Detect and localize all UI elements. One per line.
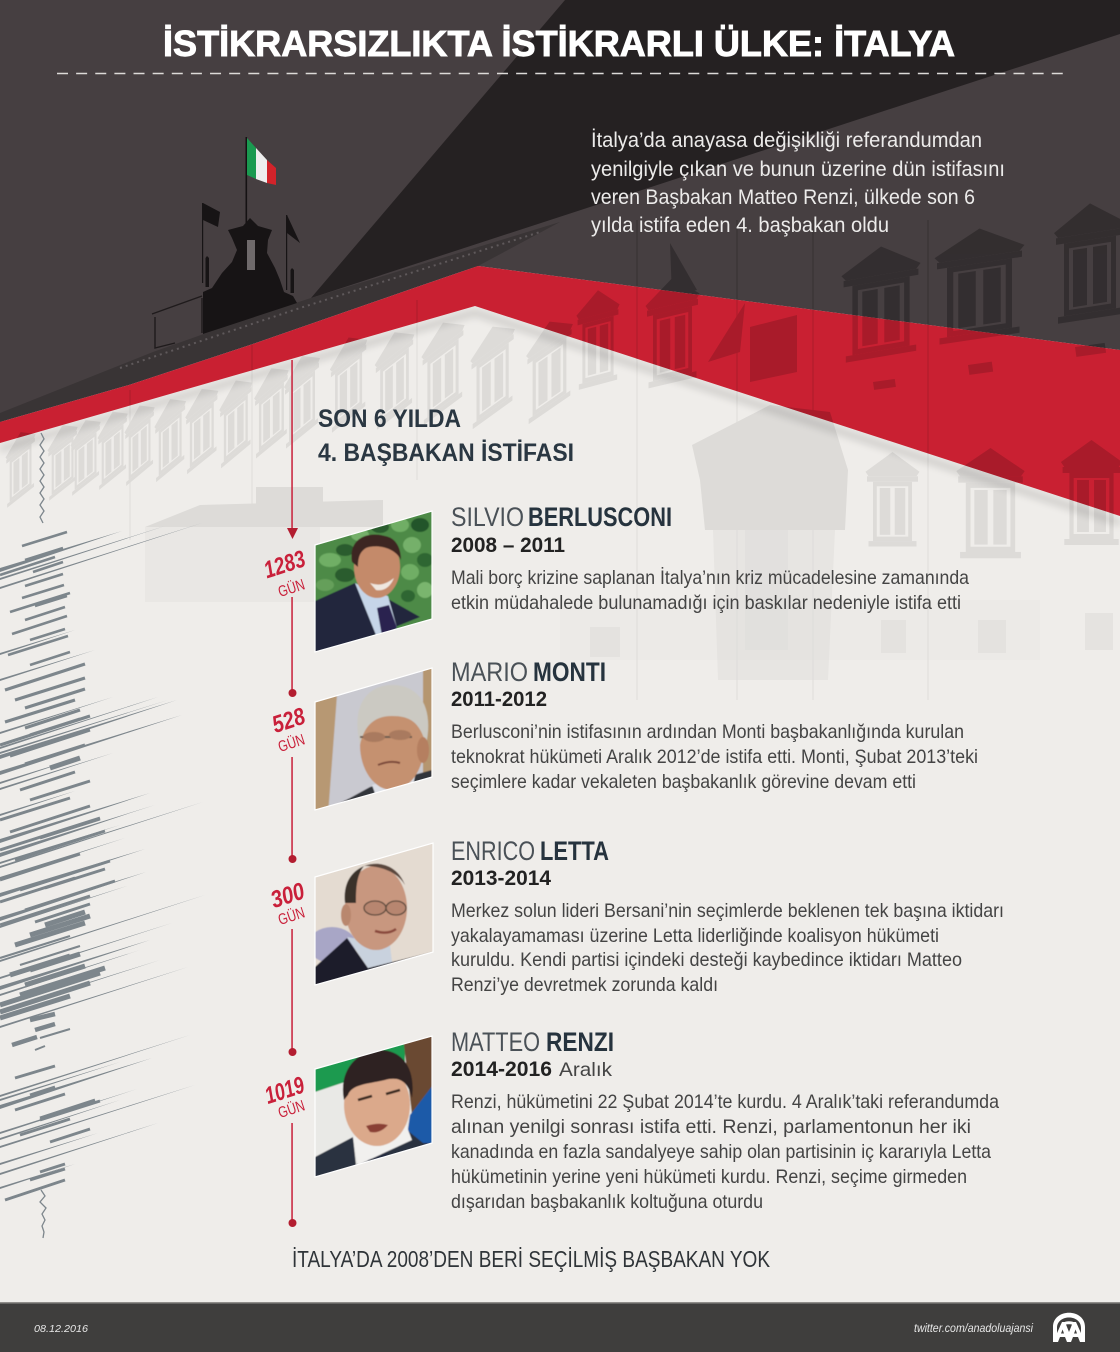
entry: Letta: yakalayamaması üzerine Letta liderliğinde koalisyon hükümeti — [451, 925, 939, 947]
entry: Berlusconi: Mali borç krizine saplanan İtalya’nın kriz mücadelesine zamanında — [451, 566, 969, 589]
entry: Monti — [451, 657, 978, 793]
entry: Letta: LETTA — [540, 836, 609, 866]
seismograph decoration — [0, 433, 205, 1238]
entry: Renzi: hükümetinin yerine yeni hükümeti kurdu. Renzi, seçime girmeden — [451, 1166, 967, 1188]
entry: Monti: 2011-2012 — [451, 688, 547, 711]
day count: 1019: GÜN — [276, 1097, 307, 1122]
day count: 300: 300 — [267, 878, 309, 914]
palace tower silhouette with flags — [152, 137, 300, 348]
entry: Berlusconi: SILVIO — [451, 502, 524, 532]
icon: Italian flag — [246, 137, 276, 225]
ghost building facade — [5, 198, 1120, 700]
entry: Berlusconi — [451, 502, 969, 614]
entry: Monti: Berlusconi’nin istifasının ardından Monti başbakanlığında kurulan — [451, 721, 964, 743]
entry: Renzi: Renzi, hükümetini 22 Şubat 2014’te kurdu. 4 Aralık’taki referandumda — [451, 1091, 999, 1113]
day count: 1283 — [261, 545, 309, 601]
intro text: İtalya’da anayasa değişikliği referandumdan — [591, 129, 982, 152]
photo: Renzi — [315, 1030, 435, 1180]
footer bar — [0, 1302, 1120, 1352]
dark header background — [0, 0, 1120, 422]
day count: 528: GÜN — [276, 731, 307, 756]
day count: 1019: 1019 — [261, 1072, 308, 1110]
entry: Renzi: RENZI — [546, 1027, 614, 1057]
icon: agency logo — [1053, 1313, 1085, 1342]
entry: Berlusconi: 2008 – 2011 — [451, 534, 565, 557]
timeline segment 5 — [288, 1123, 296, 1227]
entry: Renzi: MATTEO — [451, 1027, 540, 1057]
entry: Letta: Renzi’ye devretmek zorunda kaldı — [451, 974, 718, 996]
red roof band — [0, 266, 1120, 516]
photo: Letta — [314, 842, 434, 986]
timeline arrow — [287, 360, 298, 539]
entry: Monti: teknokrat hükümeti Aralık 2012’de istifa etti. Monti, Şubat 2013’teki — [451, 746, 978, 768]
day count: 1283: GÜN — [276, 576, 307, 601]
day count: 1019 — [261, 1072, 308, 1122]
entry: Letta: Merkez solun lideri Bersani’nin seçimlerde beklenen tek başına iktidarı — [451, 900, 1004, 922]
timeline — [287, 360, 298, 1227]
day count: 300 — [267, 878, 309, 929]
entry: Letta: 2013-2014 — [451, 867, 551, 890]
entry: Berlusconi: BERLUSCONI — [528, 502, 672, 532]
closing statement: İTALYA’DA 2008’DEN BERİ SEÇİLMİŞ BAŞBAKAN YOK — [292, 1246, 771, 1272]
entry: Berlusconi: etkin müdahalede bulunamadığı için baskılar nedeniyle istifa etti — [451, 592, 961, 614]
entry: Renzi: 2014-2016 — [451, 1058, 552, 1081]
section heading: SON 6 YILDA — [318, 405, 461, 433]
photo: Monti — [315, 660, 435, 815]
entry: Renzi: dışarıdan başbakanlık koltuğuna oturdu — [451, 1191, 763, 1213]
photo: Berlusconi — [315, 505, 435, 655]
section heading: 4. BAŞBAKAN İSTİFASI — [318, 439, 574, 467]
entry: Renzi — [451, 1027, 999, 1213]
timeline segment 3 — [288, 757, 296, 863]
intro text: yılda istifa eden 4. başbakan oldu — [591, 214, 889, 237]
intro text — [591, 129, 1005, 237]
timeline segment 2 — [288, 597, 296, 697]
soft shadow beneath red band — [0, 309, 1120, 526]
entry: Renzi: Aralık — [559, 1059, 612, 1081]
intro text: yenilgiyle çıkan ve bunun üzerine dün istifasını — [591, 158, 1005, 181]
section heading — [318, 405, 574, 467]
date: 08.12.2016 — [34, 1323, 88, 1335]
day count: 1283: 1283 — [261, 545, 309, 584]
entry: Renzi: kanadında en fazla sandalyeye sahip olan partisinin iç kararıyla Letta — [451, 1141, 991, 1163]
day count: 300: GÜN — [276, 904, 307, 929]
intro text: veren Başbakan Matteo Renzi, ülkede son 6 — [591, 186, 975, 209]
entry: Monti: MONTI — [533, 657, 606, 687]
social handle: twitter.com/anadoluajansi — [914, 1323, 1033, 1335]
entry: Renzi: alınan yenilgi sonrası istifa etti. Renzi, parlamentonun her iki — [451, 1116, 971, 1138]
entry: Monti: MARIO — [451, 657, 528, 687]
entry: Monti: seçimlere kadar vekaleten başbakanlık görevine devam etti — [451, 771, 916, 793]
day count: 528 — [269, 703, 309, 756]
entry: Letta: ENRICO — [451, 836, 535, 866]
day count: 528: 528 — [269, 703, 309, 739]
entry: Letta: kuruldu. Kendi partisi içindeki desteği kaybedince iktidarı Matteo — [451, 949, 962, 971]
title: İSTİKRARSIZLIKTA İSTİKRARLI ÜLKE: İTALYA — [163, 23, 955, 64]
entry: Letta — [451, 836, 1004, 996]
timeline segment 4 — [288, 929, 296, 1056]
